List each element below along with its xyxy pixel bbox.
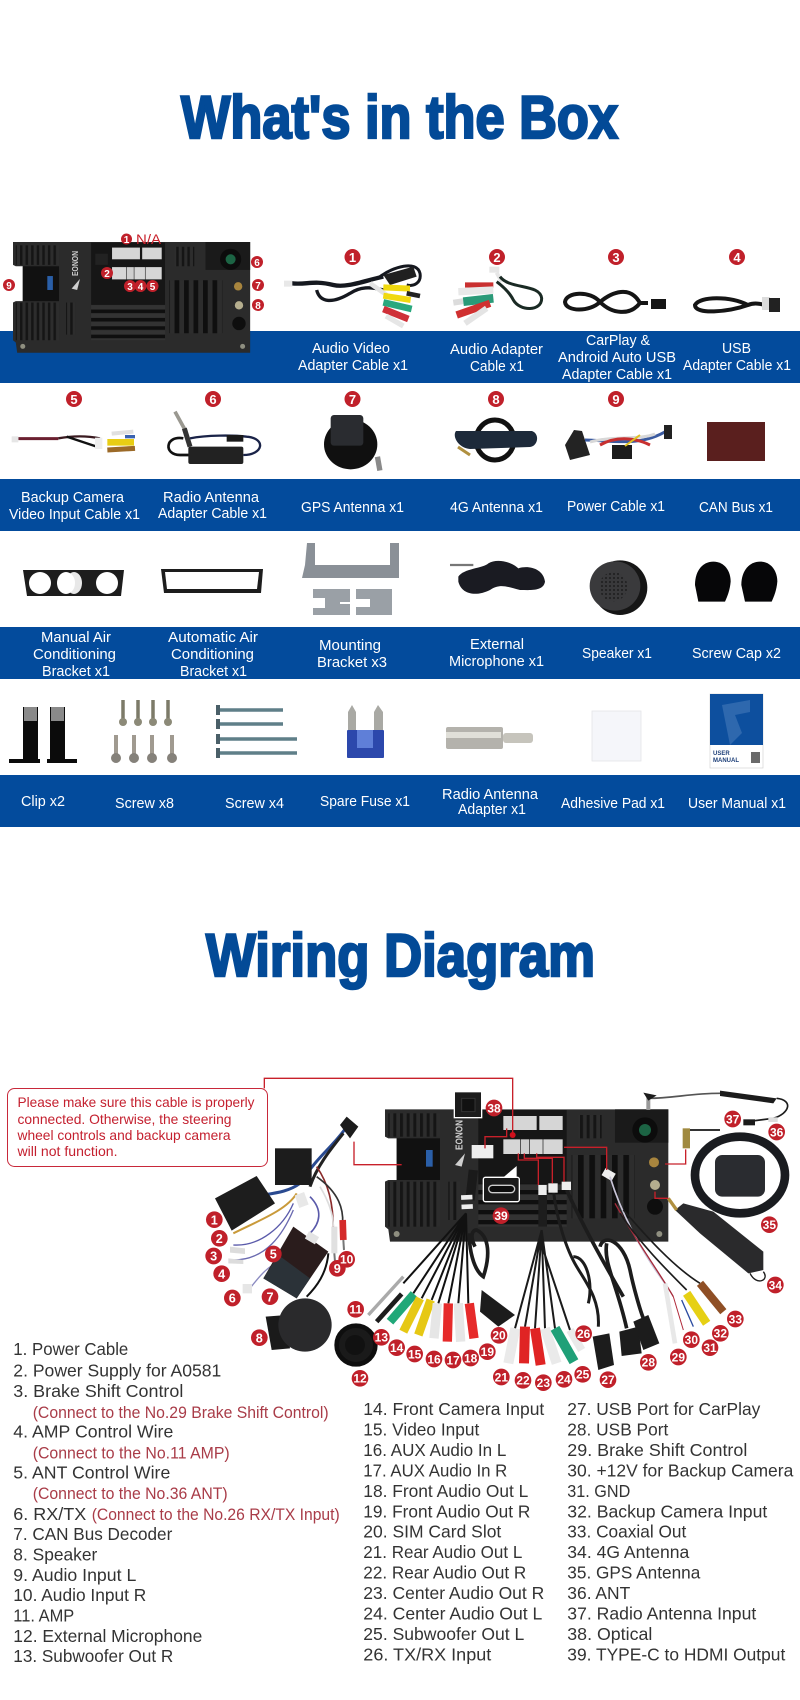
legend column 2: items 14 to 26: 24. Center Audio Out L xyxy=(363,1604,543,1624)
label: External xyxy=(470,637,524,653)
item: CAN Bus xyxy=(699,422,773,516)
icon: square connectors xyxy=(215,1176,275,1231)
label: Adapter Cable x1 xyxy=(683,358,791,374)
legend column 3: items 27 to 39: 36. ANT xyxy=(567,1583,631,1603)
label: Bracket x3 xyxy=(317,655,387,671)
label: Bracket x1 xyxy=(42,664,110,680)
item: User Manual: USER xyxy=(713,751,730,757)
item: Adhesive Pad xyxy=(561,711,665,812)
label: Screw Cap x2 xyxy=(692,646,781,662)
item: Radio Antenna Adapter xyxy=(442,727,539,818)
label: Manual Air xyxy=(41,630,111,646)
port number badges: 2 xyxy=(104,269,110,280)
port number badges: 6 xyxy=(254,258,260,269)
label xyxy=(317,638,387,671)
legend column 2: items 14 to 26: 21. Rear Audio Out L xyxy=(363,1542,523,1562)
legend column 1: items 1 to 13: 12. External Microphone xyxy=(13,1626,202,1646)
band: row 4 xyxy=(0,775,800,827)
legend column 1: items 1 to 13: (Connect to the No.26 RX/TX Input) xyxy=(92,1505,340,1524)
legend column 1: items 1 to 13: 11. AMP xyxy=(13,1606,74,1626)
label: Audio Video xyxy=(312,341,390,357)
port badges right: 21 xyxy=(495,1370,508,1384)
port badges left: 4 xyxy=(218,1267,225,1281)
port badges right: 39 xyxy=(494,1209,508,1223)
connection lines xyxy=(264,1078,686,1198)
port badges right: 32 xyxy=(714,1327,727,1341)
label: Adapter Cable x1 xyxy=(298,358,408,374)
label: Screw x4 xyxy=(225,796,284,812)
inset: optical port xyxy=(454,1092,482,1118)
port number badges: 3 xyxy=(127,282,133,293)
item: Power Cable xyxy=(565,391,672,515)
label: Conditioning xyxy=(33,647,116,663)
port badges right: 37 xyxy=(726,1112,740,1126)
item: Mounting Bracket xyxy=(302,543,399,671)
item: Screw x8 xyxy=(111,700,177,812)
label: Cable x1 xyxy=(470,359,524,375)
legend column 3: items 27 to 39: 34. 4G Antenna xyxy=(567,1542,690,1562)
band: row 1 xyxy=(0,331,800,383)
legend column 1: items 1 to 13: 1. Power Cable xyxy=(13,1339,128,1359)
arrowhead: connector pointer xyxy=(510,1132,516,1138)
port badges right: 17 xyxy=(446,1353,460,1367)
icon: GPS antenna xyxy=(683,1128,785,1213)
legend column 2: items 14 to 26: 25. Subwoofer Out L xyxy=(363,1624,525,1644)
item: Backup Camera Video Input Cable xyxy=(9,391,140,523)
item: GPS Antenna xyxy=(301,391,404,516)
label: User Manual x1 xyxy=(688,796,786,812)
legend column 2: items 14 to 26: 20. SIM Card Slot xyxy=(363,1522,501,1542)
port badges right: 15 xyxy=(408,1347,422,1361)
port number badges: 5 xyxy=(150,282,156,293)
port badges left: 7 xyxy=(266,1290,274,1304)
legend column 3: items 27 to 39: 27. USB Port for CarPlay xyxy=(567,1399,761,1419)
legend column 1: items 1 to 13: 13. Subwoofer Out R xyxy=(13,1646,173,1666)
label: Audio Adapter xyxy=(450,342,543,358)
item: Automatic Air Conditioning Bracket xyxy=(161,569,263,680)
port badges right: 19 xyxy=(481,1345,494,1359)
label xyxy=(168,630,258,680)
legend column 2: items 14 to 26: 23. Center Audio Out R xyxy=(363,1583,544,1603)
port badges right: 34 xyxy=(769,1278,782,1292)
port badges right: 22 xyxy=(516,1374,530,1388)
port number badges: 1 xyxy=(124,235,130,246)
port badges right: 31 xyxy=(703,1341,717,1355)
legend column 1: items 1 to 13: 3. Brake Shift Control xyxy=(13,1381,183,1401)
port badges right: 18 xyxy=(464,1351,478,1365)
port badges right: 28 xyxy=(642,1356,655,1370)
label: Automatic Air xyxy=(168,630,258,646)
label: CarPlay & xyxy=(586,333,650,349)
port badges left: 1 xyxy=(211,1213,218,1227)
port badges right: 27 xyxy=(601,1373,615,1387)
port number badges: 9 xyxy=(6,281,12,292)
legend column 1: items 1 to 13: 4. AMP Control Wire xyxy=(13,1422,173,1442)
legend column 1: items 1 to 13: 7. CAN Bus Decoder xyxy=(13,1524,172,1544)
icon: 4G antenna xyxy=(668,1198,765,1281)
port badges left: 6 xyxy=(229,1292,236,1306)
legend column 3: items 27 to 39: 30. +12V for Backup Camera xyxy=(567,1460,794,1480)
head unit body xyxy=(385,1109,668,1242)
port badges right: 35 xyxy=(763,1218,776,1232)
port badges left: 2 xyxy=(216,1232,223,1246)
item: External Microphone xyxy=(449,561,545,670)
item: Clip xyxy=(9,707,77,810)
legend column 1: items 1 to 13: (Connect to the No.11 AMP) xyxy=(33,1444,230,1463)
label: Adapter x1 xyxy=(458,802,526,818)
cable: 29 to 33 backup camera bundle xyxy=(602,1168,723,1343)
legend column 3: items 27 to 39: 28. USB Port xyxy=(567,1420,668,1440)
label xyxy=(683,341,791,374)
icon: CAN bus box xyxy=(707,422,765,461)
port badges right: 38 xyxy=(487,1101,501,1115)
legend column 3: items 27 to 39: 35. GPS Antenna xyxy=(567,1563,701,1583)
port badges right: 12 xyxy=(353,1372,367,1386)
item: Spare Fuse xyxy=(320,705,410,810)
port badges right xyxy=(338,1100,785,1391)
legend column 3: items 27 to 39: 39. TYPE-C to HDMI Output xyxy=(567,1644,785,1664)
label xyxy=(450,342,543,375)
item: Speaker xyxy=(582,560,652,662)
legend column 1: items 1 to 13 xyxy=(13,1339,340,1666)
legend column 3: items 27 to 39: 33. Coaxial Out xyxy=(567,1522,686,1542)
port badges right: 36 xyxy=(770,1125,784,1139)
band: row 3 xyxy=(0,627,800,679)
legend column 2: items 14 to 26: 26. TX/RX Input xyxy=(363,1644,491,1664)
port badges right: 25 xyxy=(576,1368,590,1382)
port badges left xyxy=(205,1211,346,1346)
item: 4G Antenna: 8 xyxy=(492,392,500,407)
item: Audio Video Adapter Cable xyxy=(284,249,420,374)
legend column 1: items 1 to 13: (Connect to the No.29 Brake Shift Control) xyxy=(33,1403,329,1422)
title: Wiring Diagram: Wiring Diagram xyxy=(206,922,595,989)
item: Audio Adapter Cable: 2 xyxy=(493,250,501,265)
cable: TX/RX and CarPlay USB xyxy=(548,1183,614,1370)
port badges right: 13 xyxy=(375,1331,388,1345)
icon: speaker xyxy=(266,1315,290,1350)
port badges right: 33 xyxy=(729,1312,742,1326)
item: User Manual: MANUAL xyxy=(713,758,739,764)
legend column 1: items 1 to 13: 9. Audio Input L xyxy=(13,1565,137,1585)
title: What's in the Box: What's in the Box xyxy=(181,84,618,151)
port number badges: 4 xyxy=(138,282,144,293)
legend column 2: items 14 to 26 xyxy=(363,1399,544,1664)
port number badges xyxy=(3,234,264,312)
port badges right: 10 xyxy=(340,1253,354,1267)
item: User Manual xyxy=(688,694,786,812)
callout: steering wheel warning xyxy=(8,1088,268,1166)
legend column 1: items 1 to 13: 10. Audio Input R xyxy=(13,1585,146,1605)
item: USB Adapter Cable xyxy=(683,249,791,374)
legend column 1: items 1 to 13: (Connect to the No.36 ANT) xyxy=(33,1484,228,1503)
legend column 3: items 27 to 39: 32. Backup Camera Input xyxy=(567,1501,767,1521)
label: Power Cable x1 xyxy=(567,499,665,515)
label: Clip x2 xyxy=(21,794,65,810)
cable: SIM card slot xyxy=(470,1230,515,1327)
callout: steering wheel warning: wheel controls and backup camera xyxy=(17,1127,231,1143)
callout: steering wheel warning: Please make sure this cable is properly xyxy=(18,1094,254,1110)
item: Backup Camera Video Input Cable: 5 xyxy=(70,392,78,407)
label: Speaker x1 xyxy=(582,646,652,662)
legend column 3: items 27 to 39: 31. GND xyxy=(567,1481,630,1501)
port badges left: 9 xyxy=(334,1262,341,1276)
legend column 3: items 27 to 39 xyxy=(567,1399,794,1664)
callout: N/A ports: N/A xyxy=(136,231,162,247)
port badges right: 24 xyxy=(557,1373,571,1387)
label: GPS Antenna x1 xyxy=(301,500,404,516)
item: CarPlay and Android Auto USB Adapter Cable xyxy=(558,249,676,383)
head unit body: EONON xyxy=(455,1120,466,1150)
legend column 1: items 1 to 13: 5. ANT Control Wire xyxy=(13,1463,170,1483)
port number badges: 8 xyxy=(255,301,261,312)
label xyxy=(298,341,408,374)
label: Bracket x1 xyxy=(180,664,247,680)
label: Video Input Cable x1 xyxy=(9,507,140,523)
label: Adhesive Pad x1 xyxy=(561,796,665,812)
label: Android Auto USB xyxy=(558,350,676,366)
legend column 3: items 27 to 39: 29. Brake Shift Control xyxy=(567,1440,747,1460)
legend column 3: items 27 to 39: 37. Radio Antenna Input xyxy=(567,1604,756,1624)
legend column 3: items 27 to 39: 38. Optical xyxy=(567,1624,652,1644)
item: Power Cable: 9 xyxy=(612,392,620,407)
legend column 2: items 14 to 26: 22. Rear Audio Out R xyxy=(363,1563,526,1583)
label xyxy=(33,630,116,680)
cable: USB port xyxy=(562,1182,659,1356)
legend column 2: items 14 to 26: 19. Front Audio Out R xyxy=(363,1501,530,1521)
port badges left: 8 xyxy=(256,1331,263,1345)
icon: microphone coil xyxy=(337,1326,375,1364)
label xyxy=(558,333,676,383)
port badges right: 30 xyxy=(685,1333,698,1347)
legend column 2: items 14 to 26: 14. Front Camera Input xyxy=(363,1399,544,1419)
diagram: power harness, CAN decoder, speaker and microphone xyxy=(205,1117,375,1364)
label xyxy=(9,490,140,523)
item: CarPlay and Android Auto USB Adapter Cable: 3 xyxy=(612,250,620,265)
callout: steering wheel warning: connected. Otherwise, the steering xyxy=(18,1111,232,1127)
port badges right: 14 xyxy=(390,1341,404,1355)
diagram: head unit with cables xyxy=(264,1078,788,1391)
label: Screw x8 xyxy=(115,796,174,812)
cable: radio antenna xyxy=(643,1091,788,1125)
item: Screw x4 xyxy=(216,705,297,812)
label xyxy=(449,637,544,670)
label xyxy=(442,787,539,818)
port badges right: 26 xyxy=(577,1327,591,1341)
label: USB xyxy=(722,341,751,357)
port badges right: 20 xyxy=(492,1329,506,1343)
label: CAN Bus x1 xyxy=(699,500,773,516)
item: USB Adapter Cable: 4 xyxy=(733,250,741,265)
legend column 1: items 1 to 13: 6. RX/TX xyxy=(13,1504,87,1524)
cable: rear audio RCA fan xyxy=(508,1185,582,1365)
port badges right: 11 xyxy=(349,1303,362,1317)
item: Manual Air Conditioning Bracket xyxy=(23,570,124,680)
item: Audio Adapter Cable xyxy=(450,249,543,375)
legend column 2: items 14 to 26: 15. Video Input xyxy=(363,1420,479,1440)
label: Adapter Cable x1 xyxy=(158,506,267,522)
legend column 2: items 14 to 26: 18. Front Audio Out L xyxy=(363,1481,529,1501)
item: Screw Cap xyxy=(692,562,781,662)
port badges right: 16 xyxy=(427,1352,441,1366)
legend column 1: items 1 to 13: 8. Speaker xyxy=(13,1545,97,1565)
port badges left: 5 xyxy=(270,1248,277,1262)
callout: steering wheel warning: will not function. xyxy=(16,1143,118,1159)
label: Spare Fuse x1 xyxy=(320,794,410,810)
legend column 2: items 14 to 26: 17. AUX Audio In R xyxy=(363,1460,507,1480)
item: Audio Video Adapter Cable: 1 xyxy=(349,250,356,265)
item: Radio Antenna Adapter Cable xyxy=(158,391,267,522)
label: 4G Antenna x1 xyxy=(450,500,543,516)
legend column 1: items 1 to 13: 2. Power Supply for A0581 xyxy=(13,1360,221,1380)
port badges right: 23 xyxy=(537,1376,550,1390)
label: Conditioning xyxy=(171,647,254,663)
port number badges: 7 xyxy=(255,281,261,292)
label: Microphone x1 xyxy=(449,654,544,670)
item: 4G Antenna xyxy=(450,391,543,516)
label: Adapter Cable x1 xyxy=(562,367,672,383)
port badges right: 29 xyxy=(672,1350,685,1364)
panel: head unit rear with port numbers: EONON xyxy=(70,251,80,276)
label: Radio Antenna xyxy=(442,787,539,803)
panel: head unit rear with port numbers xyxy=(3,231,264,353)
label: Backup Camera xyxy=(21,490,125,506)
legend column 2: items 14 to 26: 16. AUX Audio In L xyxy=(363,1440,507,1460)
label: Mounting xyxy=(319,638,381,654)
label: Radio Antenna xyxy=(163,490,260,506)
cable: 11 to 19 RCA fan xyxy=(368,1170,474,1342)
item: GPS Antenna: 7 xyxy=(349,392,356,407)
inset: USB-C HDMI port xyxy=(483,1166,519,1202)
connector: white plug on fan cable xyxy=(472,1145,493,1158)
icon: CAN bus decoder xyxy=(263,1227,328,1298)
item: Radio Antenna Adapter Cable: 6 xyxy=(209,392,217,407)
band: row 2 xyxy=(0,479,800,531)
port badges left: 3 xyxy=(210,1250,217,1264)
label xyxy=(158,490,267,522)
